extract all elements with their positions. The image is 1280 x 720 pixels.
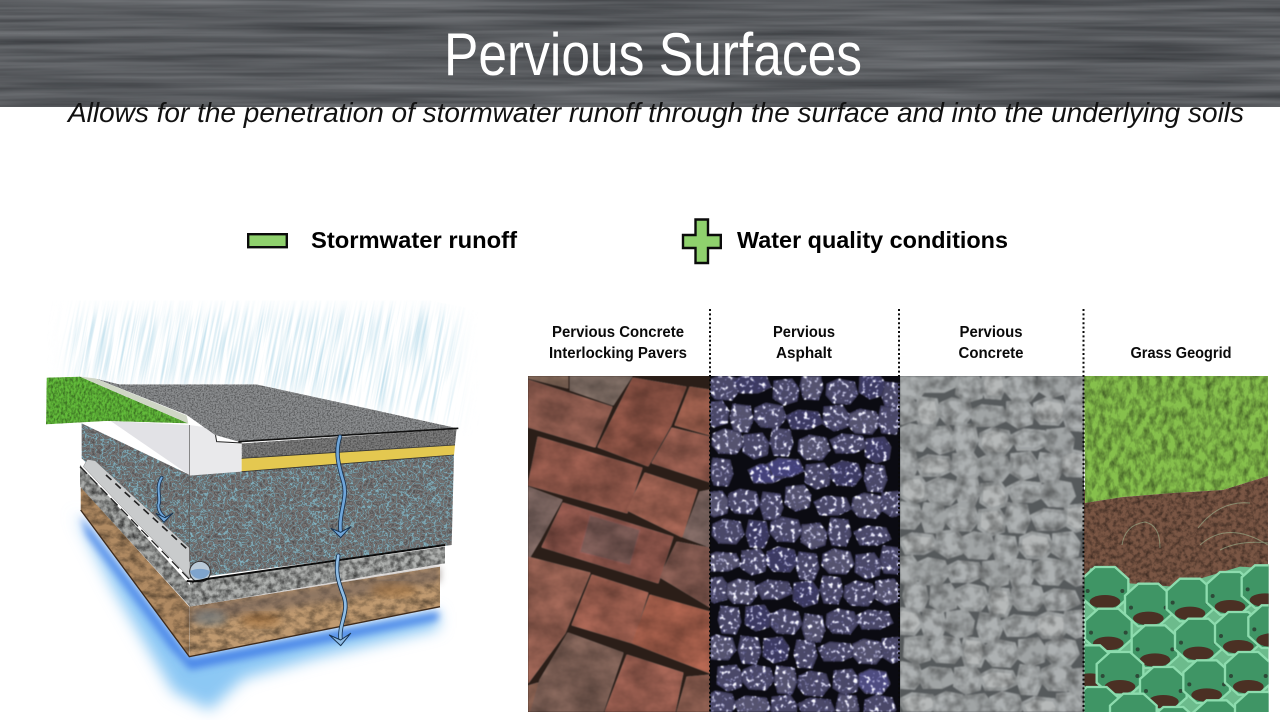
icon: plus — [683, 220, 721, 263]
arrow: infiltration into soil — [329, 556, 351, 646]
photo: brick pavers — [528, 376, 710, 712]
legend: water quality conditions — [683, 220, 1008, 263]
soil — [1084, 465, 1268, 600]
panel: pervious asphalt — [703, 324, 907, 720]
column label: Pervious — [773, 324, 835, 341]
underdrain pipe — [80, 459, 210, 583]
soil layer — [81, 487, 440, 657]
column label: Pervious Concrete — [552, 324, 684, 341]
fabric line — [187, 545, 445, 581]
ghost grid outlines in soil — [1122, 503, 1268, 550]
geogrid — [1084, 564, 1269, 712]
grass — [1084, 376, 1268, 503]
photo: pervious concrete aggregate — [900, 376, 1084, 712]
concrete curb — [111, 421, 242, 562]
panel: grass geogrid — [1084, 346, 1269, 712]
column label: Grass Geogrid — [1130, 345, 1232, 362]
blue groundwater glow — [73, 512, 439, 710]
title: Pervious Surfaces — [444, 21, 862, 88]
column label line 2: Asphalt — [776, 345, 832, 362]
yellow choker layer — [242, 445, 455, 472]
icon: minus — [248, 234, 287, 247]
column label line 2: Interlocking Pavers — [549, 345, 687, 362]
photo: grass over soil over geogrid — [1084, 376, 1269, 712]
rain — [64, 302, 462, 426]
arrow: flow to underdrain — [156, 478, 173, 522]
soil edges — [81, 510, 440, 657]
subtitle: Allows for the penetration of stormwater runoff through the surface and into the underlying soils — [66, 97, 1244, 128]
legend label: water quality conditions: Water quality conditions — [737, 227, 1008, 253]
header banner — [0, 0, 1280, 107]
lower stone layer — [80, 465, 445, 607]
column label: Pervious — [960, 324, 1022, 341]
legend label: stormwater runoff: Stormwater runoff — [311, 227, 517, 253]
aggregate reservoir layer — [82, 423, 454, 578]
pavement surface — [95, 378, 458, 442]
panel: pervious pavement cross-section diagram — [46, 302, 462, 718]
legend: stormwater runoff — [248, 227, 517, 253]
grass verge — [46, 377, 188, 424]
porous asphalt layer — [238, 428, 458, 458]
photo: asphalt aggregate — [710, 376, 900, 712]
panel: pervious concrete — [900, 326, 1084, 712]
column label line 2: Concrete — [958, 345, 1024, 362]
panel: pervious concrete interlocking pavers — [528, 324, 710, 712]
arrow: infiltration through surface — [331, 437, 351, 538]
